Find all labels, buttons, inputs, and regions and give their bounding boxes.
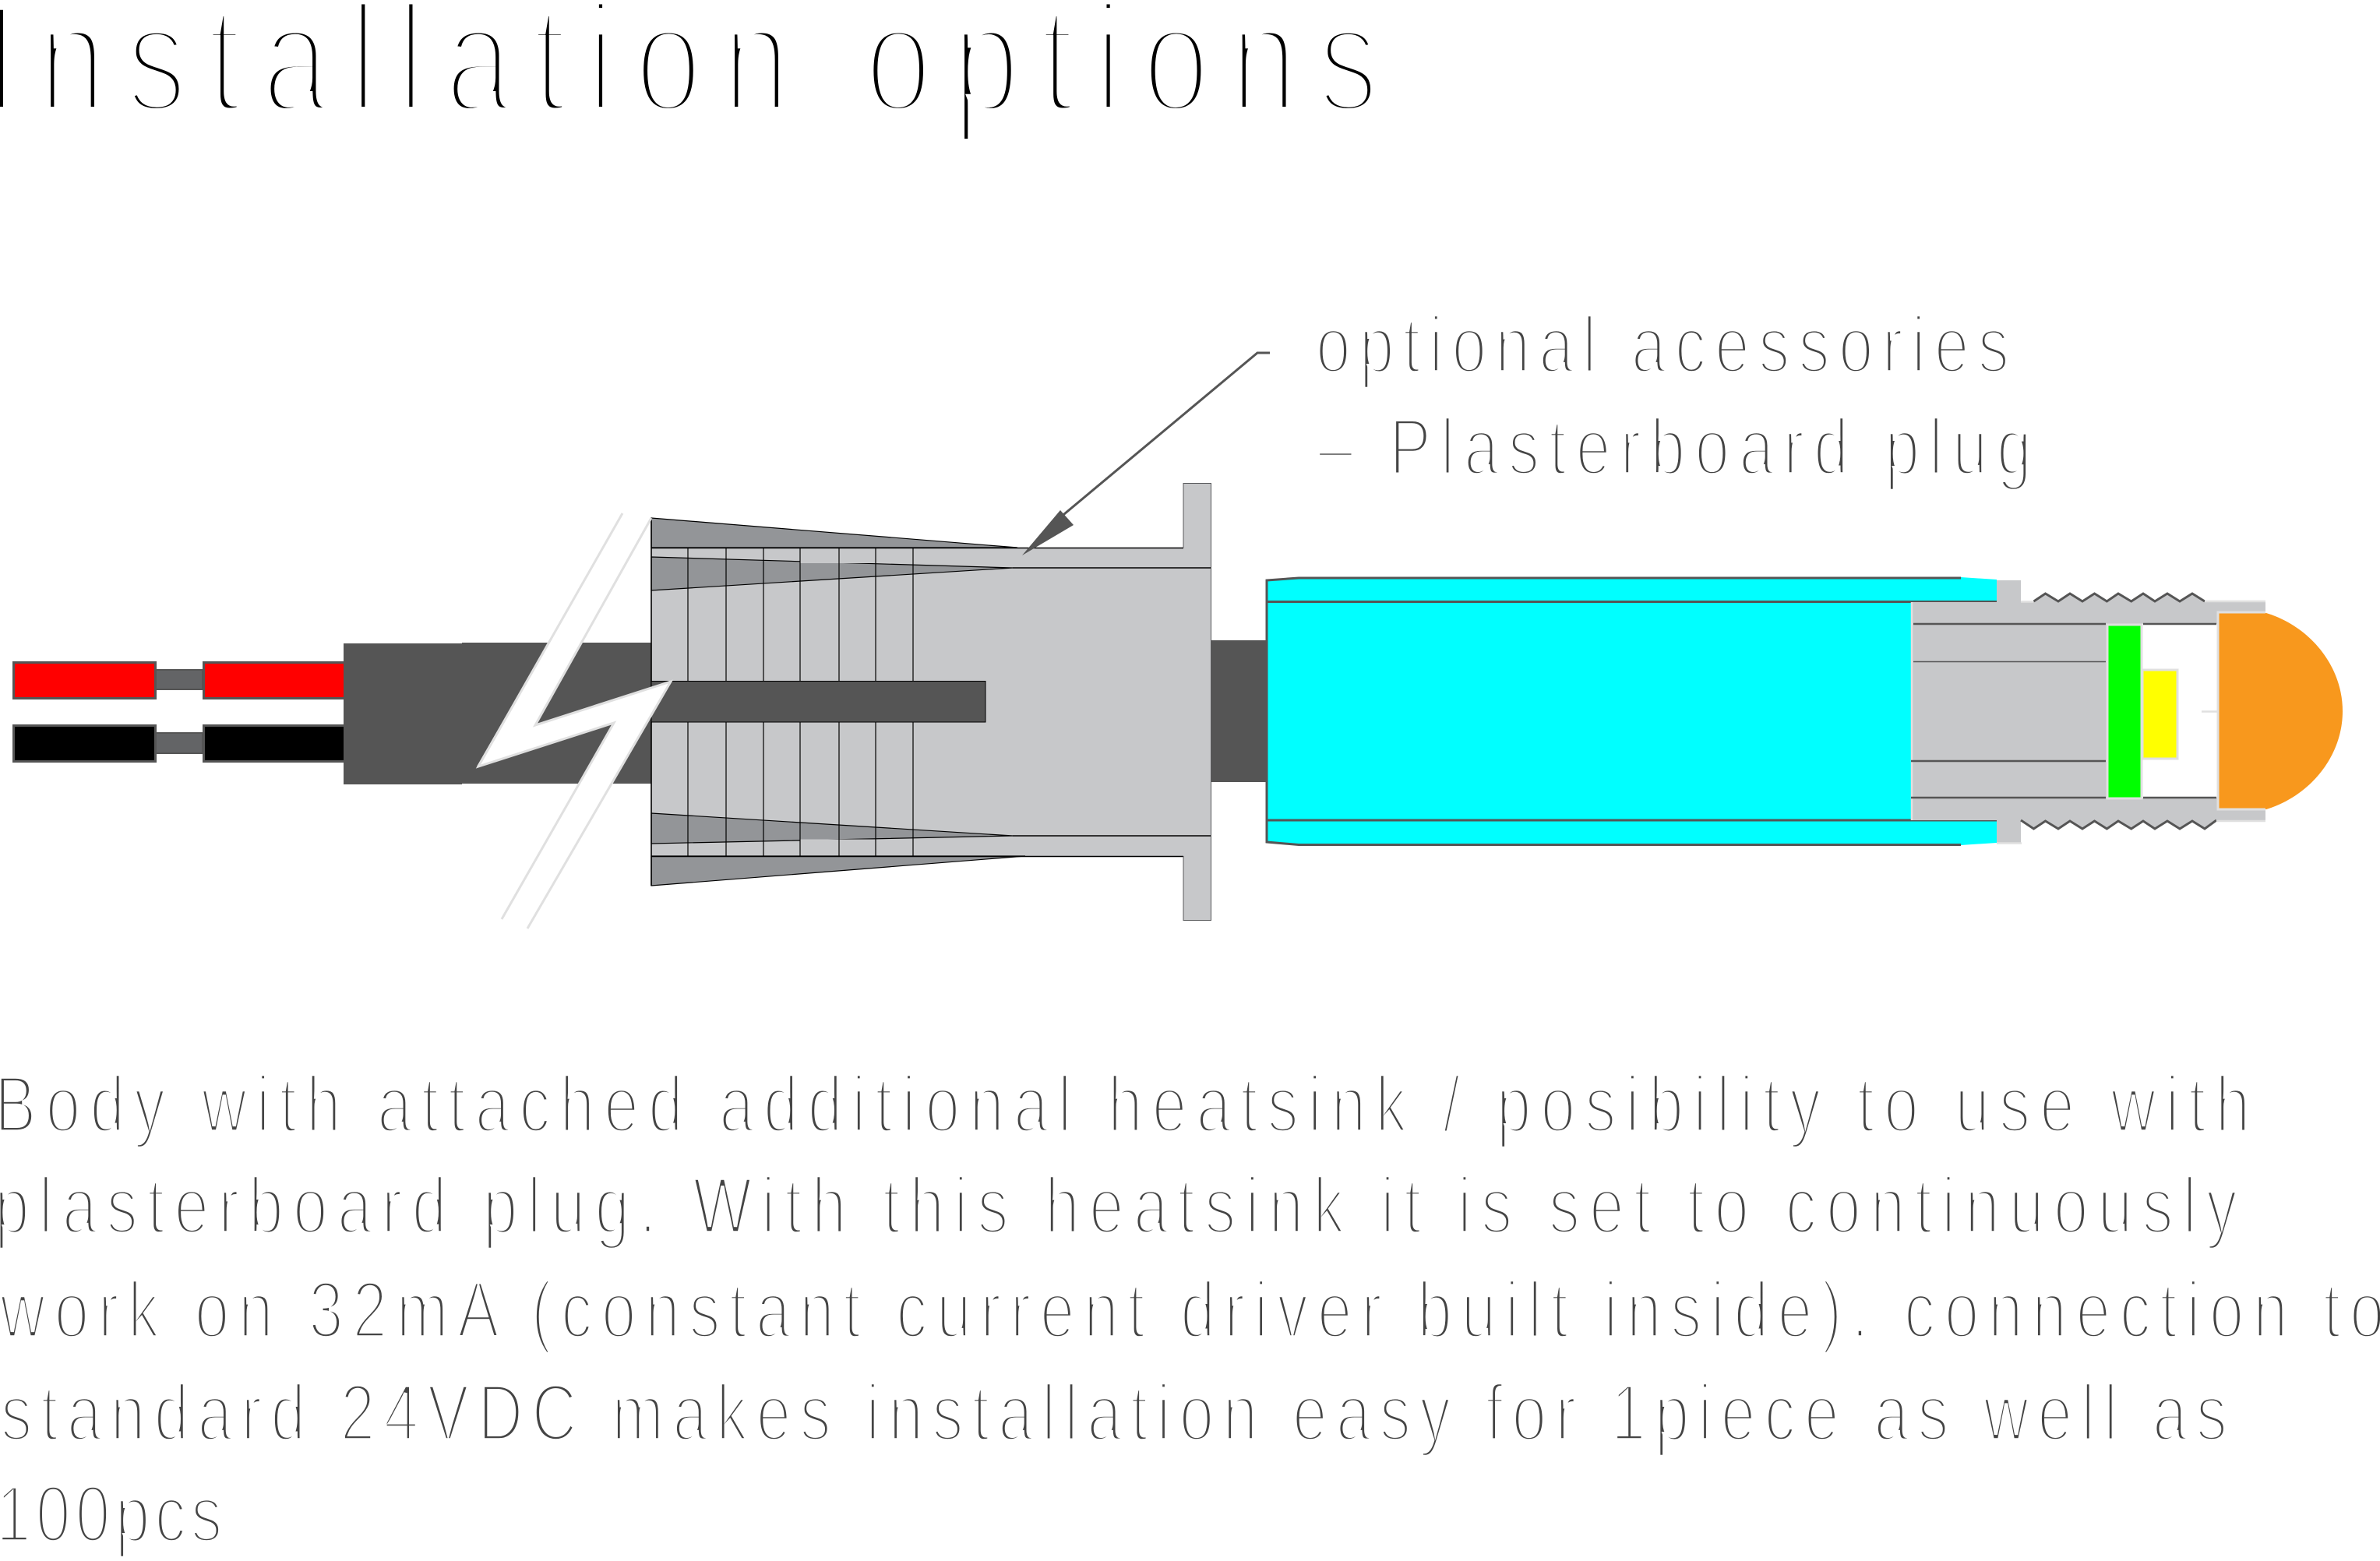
red wire xyxy=(14,662,346,698)
lower inner wing xyxy=(651,813,1013,844)
upper inner wing xyxy=(651,557,1013,590)
center tick xyxy=(2202,710,2217,713)
plasterboard plug xyxy=(651,483,1211,921)
description text: standard 24VDC makes installation easy for 1piece as well as xyxy=(1,1367,2227,1457)
orange lens xyxy=(2219,613,2343,809)
callout text: optional accessories: – Plasterboard plug xyxy=(1318,401,2032,492)
plug lines xyxy=(651,518,1211,886)
threaded housing xyxy=(1911,580,2265,843)
upper outer wing xyxy=(651,518,1017,548)
description text xyxy=(0,1059,2380,1559)
green circuit board xyxy=(2107,625,2142,798)
yellow LED xyxy=(2142,670,2177,759)
description text: plasterboard plug. With this heatsink it is set to continuously xyxy=(0,1160,2237,1250)
lens edge xyxy=(2218,612,2265,809)
plug ribs xyxy=(688,548,913,856)
inner housing lines xyxy=(1911,624,2216,798)
cable sheath xyxy=(344,643,985,784)
cable stub xyxy=(1211,640,1266,782)
arrow to plasterboard plug xyxy=(1022,353,1270,555)
description text: Body with attached additional heatsink / posibility to use with xyxy=(0,1059,2250,1149)
body with heatsink xyxy=(1266,577,1997,845)
heatsink xyxy=(1266,577,1997,845)
lighter patches on wings xyxy=(800,560,876,842)
light edges xyxy=(1912,601,2265,843)
black wire xyxy=(14,726,346,762)
callout text: optional accessories xyxy=(1316,299,2032,492)
lamp head xyxy=(1911,580,2343,843)
cable with wires xyxy=(14,643,985,784)
description text: 100pcs xyxy=(0,1468,222,1559)
break mark xyxy=(477,513,671,928)
description text: work on 32mA (constant current driver built inside), connection to xyxy=(0,1264,2380,1355)
lower outer wing xyxy=(651,856,1025,886)
thread lines xyxy=(2021,594,2216,829)
cable inside plug xyxy=(651,681,985,722)
plug body xyxy=(651,483,1211,921)
flange outline xyxy=(1183,483,1211,921)
heatsink outline xyxy=(1267,578,1997,844)
LED cavity xyxy=(2141,624,2218,798)
callout text: optional accessories: optional acessories xyxy=(1316,299,2009,389)
